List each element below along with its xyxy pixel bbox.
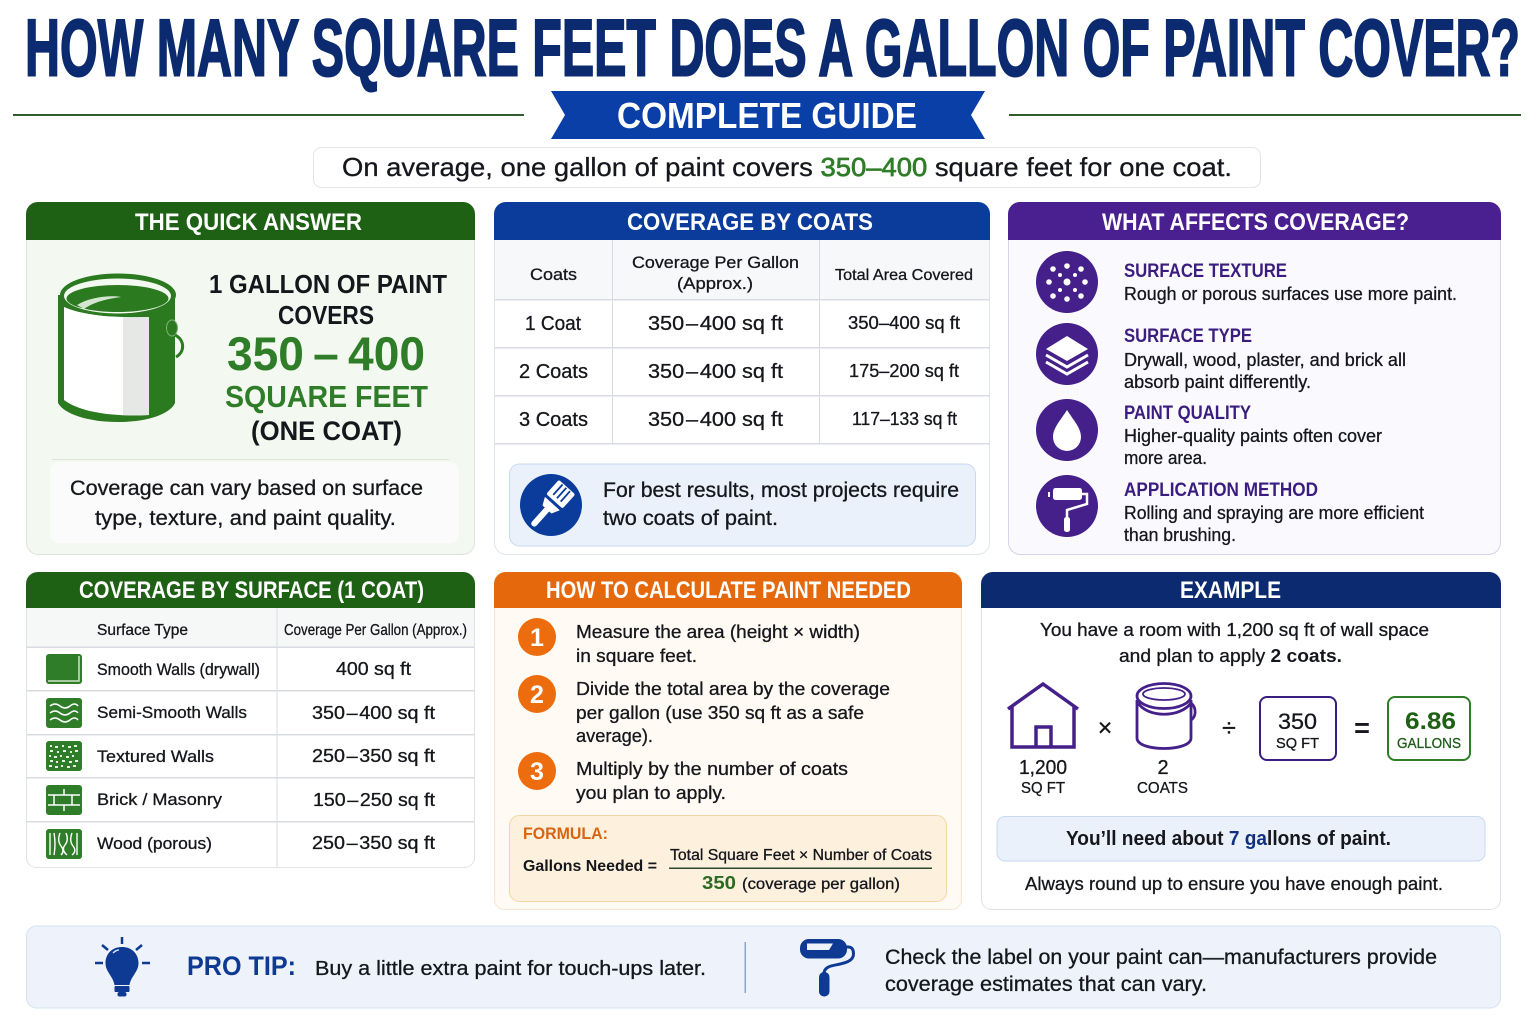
table: surfaces: 250 – 350 sq ft <box>312 833 435 853</box>
formula box: Total Square Feet × Number of Coats <box>670 847 932 864</box>
callout: two coats: For best results, most projects require <box>603 479 959 502</box>
text: application method <box>1124 480 1424 545</box>
table: coats: Coverage Per Gallon <box>632 253 799 272</box>
text: surface type: Drywall, wood, plaster, and brick all <box>1124 350 1406 370</box>
formula box: Gallons Needed = <box>523 858 657 875</box>
box: 6.86 gallons: GALLONS <box>1397 736 1461 752</box>
icon: brick wall <box>46 785 82 815</box>
step 1: Measure the area (height × width) <box>576 622 860 642</box>
text: surface texture: Rough or porous surfaces use more paint. <box>1124 284 1457 304</box>
table: coats: 175–200 sq ft <box>849 361 959 381</box>
table: surfaces: Textured Walls <box>97 747 214 766</box>
icon: paint can <box>58 274 183 422</box>
table: surfaces: Brick / Masonry <box>97 790 223 809</box>
box: 350 sq ft <box>1260 697 1336 760</box>
table: surfaces: Coverage Per Gallon (Approx.) <box>284 622 467 639</box>
icon: smooth wall <box>46 654 82 684</box>
pro tip label: PRO TIP: <box>187 951 296 981</box>
example intro <box>1040 620 1429 666</box>
result box <box>997 816 1485 861</box>
icon: bucket <box>1137 684 1195 748</box>
table: surfaces: Surface Type <box>97 622 188 639</box>
icon: surface texture <box>1036 251 1098 313</box>
box: 350 sq ft: 350 <box>1278 709 1317 734</box>
table: coats: 117–133 sq ft <box>852 409 957 429</box>
table: coats: 350 – 400 sq ft <box>648 313 783 335</box>
table: coats: Total Area Covered <box>835 267 973 284</box>
table: coats: 2 Coats <box>519 361 588 383</box>
step 2 <box>518 675 890 746</box>
heading: COVERAGE BY COATS <box>627 209 873 236</box>
rounding note: Always round up to ensure you have enough paint. <box>1025 874 1443 894</box>
formula box <box>510 816 946 902</box>
icon: textured wall <box>46 741 82 771</box>
step 3: you plan to apply. <box>576 783 726 803</box>
panel: pro tip <box>26 926 1500 1008</box>
table: coats: (Approx.) <box>677 274 753 293</box>
text: paint quality: Higher-quality paints often cover <box>1124 426 1382 446</box>
label tip text: coverage estimates that can vary. <box>885 973 1207 996</box>
text: surface type <box>1124 326 1406 392</box>
icon: semi-smooth wall <box>46 698 82 728</box>
box: 6.86 gallons <box>1388 697 1470 760</box>
answer text: SQUARE FEET <box>225 379 428 414</box>
heading: THE QUICK ANSWER <box>135 209 362 236</box>
table: coats <box>495 240 989 444</box>
step 3: 3 <box>530 758 544 786</box>
formula box: 350 <box>702 873 736 893</box>
box: 350 sq ft: SQ FT <box>1276 735 1319 752</box>
icon: paint quality <box>1036 399 1098 461</box>
heading: EXAMPLE <box>1180 577 1281 604</box>
label: 2 coats: COATS <box>1137 780 1188 797</box>
icon: wood <box>46 829 82 859</box>
label tip text: Check the label on your paint can—manufacturers provide <box>885 946 1437 969</box>
table: coats: 350 – 400 sq ft <box>648 409 783 431</box>
table: surfaces: Smooth Walls (drywall) <box>97 660 260 679</box>
answer text: COVERS <box>278 300 374 330</box>
heading: WHAT AFFECTS COVERAGE? <box>1102 209 1409 236</box>
table: surfaces: 250 – 350 sq ft <box>312 746 435 766</box>
step 3: Multiply by the number of coats <box>576 759 848 779</box>
icon: house <box>1008 684 1078 747</box>
label: 1,200 sq ft: SQ FT <box>1021 780 1065 797</box>
operator: divide: ÷ <box>1222 714 1236 742</box>
text: application method: Rolling and spraying are more efficient <box>1124 503 1424 523</box>
heading: HOW TO CALCULATE PAINT NEEDED <box>546 577 911 604</box>
note box: Coverage can vary based on surface <box>70 477 423 500</box>
icon: surface type <box>1036 323 1098 385</box>
example intro: and plan to apply 2 coats. <box>1119 646 1342 666</box>
table: coats: 350 – 400 sq ft <box>648 361 783 383</box>
table: coats: Coats <box>530 265 577 284</box>
text: application method: APPLICATION METHOD <box>1124 480 1318 501</box>
icon: application method <box>1036 475 1098 537</box>
text: application method: than brushing. <box>1124 525 1236 545</box>
table: coats: 350–400 sq ft <box>848 313 960 333</box>
table: surfaces: 350 – 400 sq ft <box>312 703 435 723</box>
table: surfaces: 150 – 250 sq ft <box>313 790 435 810</box>
callout: two coats <box>510 464 976 546</box>
step 3 <box>518 752 848 803</box>
icon: paint roller <box>800 939 854 996</box>
panel: what affects coverage <box>1008 202 1501 554</box>
step 2: Divide the total area by the coverage <box>576 679 890 699</box>
text: surface texture <box>1124 261 1457 304</box>
formula box: (coverage per gallon) <box>742 876 900 893</box>
text: surface texture: SURFACE TEXTURE <box>1124 261 1287 282</box>
step 1: in square feet. <box>576 646 697 666</box>
panel: coverage by surface <box>26 572 475 868</box>
label: 2 coats <box>1137 757 1188 797</box>
text: paint quality: more area. <box>1124 448 1207 468</box>
step 2: average). <box>576 726 653 746</box>
table: surfaces: Wood (porous) <box>97 834 212 853</box>
step 2: per gallon (use 350 sq ft as a safe <box>576 703 864 723</box>
box: 6.86 gallons: 6.86 <box>1405 708 1456 735</box>
formula box: FORMULA: <box>523 824 608 843</box>
result box: You’ll need about 7 gallons of paint. <box>1066 828 1391 850</box>
text: surface type: SURFACE TYPE <box>1124 326 1252 347</box>
table: surfaces: Semi-Smooth Walls <box>97 703 247 722</box>
icon: light bulb <box>95 937 150 996</box>
operator: times: × <box>1098 714 1112 742</box>
text: paint quality: PAINT QUALITY <box>1124 403 1251 424</box>
panel: how to calculate <box>494 572 962 910</box>
panel: example <box>981 572 1501 910</box>
subtitle callout: On average, one gallon of paint covers 350–400 square feet for one coat. <box>342 152 1232 182</box>
icon: paint brush <box>520 474 582 536</box>
ribbon: complete guide <box>551 91 985 139</box>
heading: COVERAGE BY SURFACE (1 COAT) <box>79 577 424 604</box>
step 1 <box>518 618 860 666</box>
pro tip text: Buy a little extra paint for touch-ups later. <box>315 958 706 980</box>
table: coats: 1 Coat <box>525 313 581 335</box>
answer text: 1 GALLON OF PAINT <box>209 269 447 299</box>
panel: coverage by coats <box>494 202 990 554</box>
label: 1,200 sq ft <box>1019 757 1067 797</box>
answer text <box>209 269 447 446</box>
label: 2 coats: 2 <box>1157 757 1169 779</box>
panel: the quick answer <box>26 202 475 554</box>
operator: equals: = <box>1354 713 1370 743</box>
text: paint quality <box>1124 403 1382 468</box>
step 2: 2 <box>530 681 544 709</box>
table: coats: 3 Coats <box>519 409 588 431</box>
step 1: 1 <box>530 624 544 652</box>
subtitle callout <box>314 148 1260 188</box>
label: 1,200 sq ft: 1,200 <box>1019 757 1067 779</box>
callout: two coats: two coats of paint. <box>603 507 778 530</box>
answer text: 350 – 400 <box>227 327 425 380</box>
note box <box>50 462 459 543</box>
table: surfaces <box>27 608 474 867</box>
note box: type, texture, and paint quality. <box>95 507 396 530</box>
table: surfaces: 400 sq ft <box>336 659 411 679</box>
answer text: (ONE COAT) <box>251 416 402 446</box>
label tip text <box>885 946 1437 996</box>
text: surface type: absorb paint differently. <box>1124 372 1311 392</box>
example intro: You have a room with 1,200 sq ft of wall space <box>1040 620 1429 640</box>
ribbon: complete guide: COMPLETE GUIDE <box>617 95 917 136</box>
